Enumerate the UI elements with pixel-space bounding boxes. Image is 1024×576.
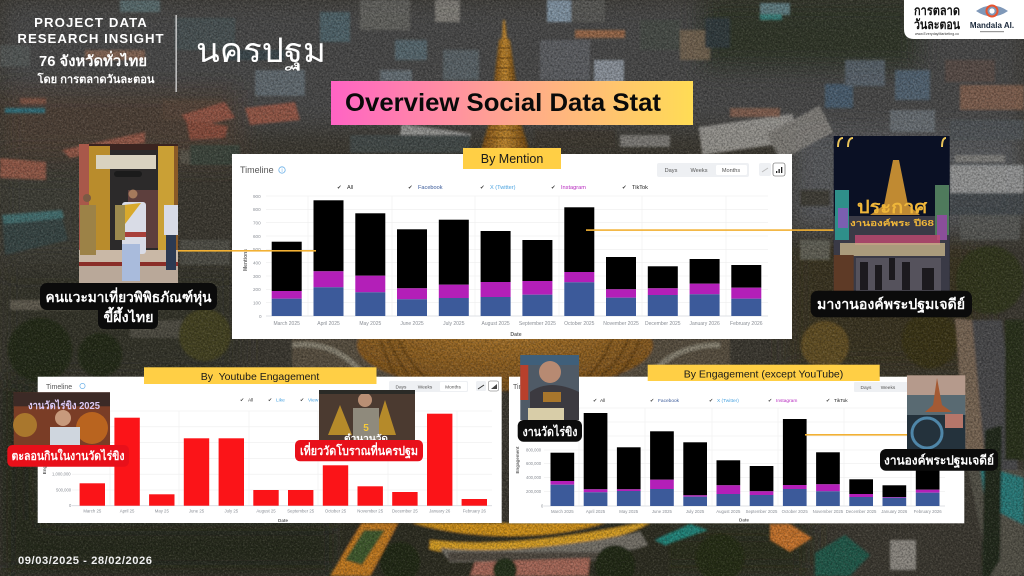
tag: by mention [463,148,561,169]
legend [240,398,319,404]
x axis labels: March 2025 [551,509,574,514]
header: project text: โดย การตลาดวันละตอน [36,72,155,86]
panel: chart by mention [232,154,792,339]
x axis labels: August 25 [256,508,276,514]
legend: All [248,398,253,404]
x axis labels: March 2025 [273,321,300,327]
tiled gable [330,523,398,576]
y axis [243,194,262,319]
x axis labels [551,509,942,522]
y axis: 500,000 [56,488,72,492]
panel: chart by youtube engagement [38,377,502,523]
chart heading: timeline: Timeline [513,384,539,391]
x axis labels: May 2025 [619,509,639,514]
y axis: 800,000 [526,448,542,452]
y axis: 900 [253,194,261,199]
connector arrow: festival to October engagement [805,434,907,436]
photo: chedi and ferris wheel [907,375,965,449]
legend: Facebook [418,185,443,191]
callout: youtube temple video: เที่ยววัดโบราณที่นครปฐม [300,442,418,459]
x axis labels: October 25 [325,508,347,514]
callout: festival: มางานองค์พระปฐมเจดีย์ [817,296,965,314]
x axis labels: July 2025 [443,321,465,327]
y axis: 200,000 [526,489,542,494]
logos panel [904,0,1024,39]
date range: 09/03/2025 - 28/02/2026 [18,555,153,567]
callout: youtube food video [7,445,129,467]
callout: องค์พระปฐมเจดีย์ [880,449,998,471]
x axis labels: February 2026 [914,509,942,514]
x axis labels: May 2025 [359,321,381,327]
panel: chart by engagement except youtube [509,377,964,523]
x axis labels: November 2025 [813,509,844,514]
legend: X (Twitter) [717,398,739,404]
legend: TikTok [632,185,648,191]
x axis labels: April 25 [120,508,135,514]
y axis: 400 [253,260,261,266]
tag: by engagement except youtube: By Engagement (except YouTube) [684,368,843,380]
x axis labels: June 2025 [652,509,673,514]
header: project text: RESEARCH INSIGHT [17,31,165,46]
x axis labels: February 26 [463,508,486,514]
x axis labels: January 2026 [881,509,908,514]
range buttons [657,163,785,177]
legend: ✔ [551,185,556,191]
stacked bars [550,413,940,506]
callout: wax museum: ขี้ผึ้งไทย [104,306,154,325]
range buttons [854,382,912,392]
legend: ✔ [480,185,485,191]
chart heading: timeline: Timeline [46,384,72,391]
logo: การตลาดวันละตอน: การตลาด [914,3,960,18]
photo: youtube temple video [319,390,415,443]
chart heading: timeline [46,383,85,391]
legend [337,185,648,191]
legend: Facebook [658,398,680,404]
range buttons: Days [665,168,678,174]
photo: wax museum [79,144,178,283]
x axis labels: July 25 [224,508,239,514]
legend: ✔ [622,185,627,191]
range buttons: Weeks [690,168,708,174]
y axis: 600,000 [526,461,542,466]
legend: ✔ [337,185,342,191]
y axis: Mentions [243,249,249,271]
title banner: Overview Social Data Stat [345,89,662,117]
y axis: Engagement [515,446,520,474]
header divider [176,15,177,92]
red bars [80,414,487,506]
x axis labels: October 2025 [782,509,808,514]
range buttons: Days [861,385,872,391]
central pagoda [494,20,516,82]
legend: Instagram [776,398,797,404]
x axis labels: February 2026 [730,321,763,327]
x axis labels: January 2026 [689,321,720,327]
range buttons [389,381,498,392]
range buttons: Weeks [418,384,433,390]
y axis: 300 [253,274,261,279]
legend: ✔ [300,398,304,404]
logo: Mandala AI: Mandala AI. [970,21,1014,30]
callout: wax museum [40,283,217,329]
x axis labels: September 2025 [519,321,556,327]
logo: การตลาดวันละตอน: วันละตอน [914,17,961,32]
tag: by youtube engagement [144,367,376,384]
title banner [331,81,693,125]
callout: องค์พระปฐมเจดีย์: งานองค์พระปฐมเจดีย์ [884,452,994,468]
x axis labels: November 2025 [603,321,639,327]
x axis labels: July 2025 [686,509,705,514]
legend: All [347,185,353,191]
photo: youtube food video [13,392,110,446]
y axis: 100 [253,300,261,306]
lower chedi rings [340,523,670,576]
photo: festival poster: ประกาศ [857,197,928,217]
x axis labels: September 2025 [746,509,778,514]
legend: ✔ [408,185,413,191]
x axis labels: June 2025 [400,321,424,327]
header: project text: PROJECT DATA [34,15,148,30]
legend [593,398,848,404]
x axis labels: September 25 [287,508,315,514]
callout: wat rai khing [518,420,582,442]
tag: by engagement except youtube [648,365,880,381]
range buttons: Weeks [881,385,896,391]
header: project text [17,15,165,86]
callout: youtube food video: ตะลอนกินในงานวัดไร่ขิง [12,448,125,463]
range buttons: Months [722,168,740,174]
callout: festival [811,291,972,317]
header: project text: 76 จังหวัดทั่วไทย [39,50,147,70]
x axis labels: Date [739,518,749,522]
callout: wax museum: คนแวะมาเที่ยวพิพิธภัณฑ์หุ่น [46,287,212,306]
x axis labels: January 26 [429,508,451,514]
y axis: 200 [253,287,261,292]
callout: wat rai khing: งานวัดไร่ขิง [522,424,578,439]
connector arrow: wax museum to April [178,250,316,252]
legend: View [308,398,319,404]
photo: festival poster [834,136,950,291]
legend: All [600,398,605,404]
legend: ✔ [593,398,597,404]
x axis labels: December 2025 [645,321,681,327]
photo: youtube temple video: 5 [363,423,369,434]
chart heading: timeline: Timeline [240,165,274,175]
x axis labels: December 2025 [846,509,877,514]
x axis labels: December 25 [392,508,418,514]
logo: การตลาดวันละตอน: www.EverydayMarketing.co [915,32,959,36]
legend: ✔ [826,398,830,404]
legend: ✔ [709,398,713,404]
legend: TikTok [834,398,848,404]
x axis labels: August 2025 [716,509,741,514]
photo: festival poster: งานองค์พระ ปี68 [850,218,934,228]
legend: X (Twitter) [490,185,516,191]
photo: man eating at wat rai khing [520,355,579,420]
photo: youtube temple video: ตำนานวัด [344,433,388,443]
y axis [515,446,544,508]
golden chedi dome [292,339,730,377]
province name: นครปฐม [196,32,326,71]
x axis labels: Date [510,332,522,338]
x axis labels [273,321,763,338]
x axis labels [83,508,486,523]
x axis labels: November 25 [357,508,384,514]
x axis labels: March 25 [83,508,102,514]
range buttons: Months [445,384,461,390]
y axis: 0 [259,314,262,319]
x axis labels: May 25 [155,508,169,514]
chart heading: timeline: i [281,168,283,174]
x axis labels: April 2025 [317,321,340,327]
x axis labels: April 2025 [586,509,606,514]
legend: ✔ [240,398,244,404]
legend: ✔ [768,398,772,404]
y axis: 800 [253,207,261,212]
stacked bars [272,200,761,316]
x axis labels: October 2025 [564,321,595,327]
road [972,320,1018,470]
y axis: 700 [253,220,261,226]
x axis labels: Date [278,518,288,523]
y axis: 600 [253,234,261,239]
range buttons: Days [396,384,407,390]
connector arrow: festival to October mention [586,229,834,231]
y axis: 1,000,000 [52,472,71,476]
y axis: 500 [253,247,261,252]
legend: ✔ [650,398,654,404]
x axis labels: June 25 [189,508,205,514]
logo: การตลาดวันละตอน [914,3,961,36]
legend: Instagram [561,185,586,191]
photo: youtube food video: งานวัดไร่ขิง 2025 [28,399,100,412]
city blocks [0,0,1024,382]
callout: youtube temple video [295,440,423,461]
y axis [42,465,72,508]
y axis: 0 [541,504,544,508]
tag: by youtube engagement: By Youtube Engagement [201,371,319,383]
y axis: 0 [69,503,72,508]
y axis: Eng [42,465,47,474]
x axis labels: August 2025 [482,321,510,327]
y axis: 400,000 [526,475,542,480]
legend: ✔ [268,398,272,404]
legend: Like [276,398,285,404]
tag: by mention: By Mention [481,152,543,166]
